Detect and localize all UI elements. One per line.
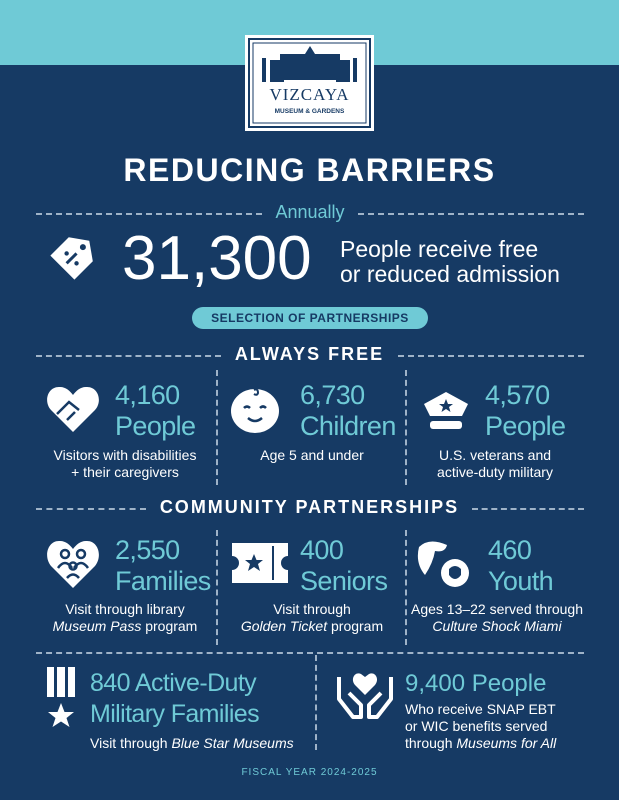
description: U.S. veterans and bbox=[439, 447, 551, 463]
big number caption bbox=[340, 236, 560, 287]
panel: veterans bbox=[424, 380, 565, 480]
number: 840 Active-Duty bbox=[90, 669, 256, 697]
number bbox=[115, 535, 211, 596]
number: 9,400 People bbox=[405, 670, 546, 697]
number bbox=[90, 669, 259, 728]
number: 400 bbox=[300, 535, 343, 565]
number bbox=[300, 380, 396, 441]
description: Visit through Blue Star Museums bbox=[90, 735, 294, 751]
number: Families bbox=[115, 566, 211, 596]
number: Military Families bbox=[90, 700, 259, 728]
top band bbox=[0, 0, 619, 65]
big number: 31,300 bbox=[122, 224, 312, 293]
description bbox=[411, 601, 583, 634]
description: Visit through bbox=[273, 601, 351, 617]
pill: SELECTION OF PARTNERSHIPS bbox=[211, 311, 409, 325]
big number caption: or reduced admission bbox=[340, 261, 560, 287]
big number caption: People receive free bbox=[340, 236, 538, 262]
description: through Museums for All bbox=[405, 735, 556, 751]
icon: hands heart bbox=[337, 673, 393, 719]
icon: youth faces bbox=[418, 542, 469, 587]
panel: military families bbox=[47, 667, 294, 751]
panel: children bbox=[231, 380, 396, 463]
description: Museum Pass program bbox=[53, 618, 197, 634]
description: Who receive SNAP EBT bbox=[405, 701, 556, 717]
number bbox=[300, 535, 387, 596]
logo bbox=[248, 38, 371, 128]
panel: disabilities bbox=[47, 380, 196, 480]
annually label: Annually bbox=[275, 202, 345, 222]
icon: tag bbox=[50, 237, 93, 280]
panel: families bbox=[47, 535, 211, 634]
icon: heart handshake bbox=[47, 387, 99, 432]
description: Culture Shock Miami bbox=[432, 618, 562, 634]
description bbox=[405, 701, 557, 751]
description bbox=[241, 601, 383, 634]
icon: ticket bbox=[232, 543, 288, 583]
logo: MUSEUM & GARDENS bbox=[275, 108, 345, 115]
number: 4,160 bbox=[115, 380, 180, 410]
description: Ages 13–22 served through bbox=[411, 601, 583, 617]
number: Children bbox=[300, 411, 396, 441]
number bbox=[488, 535, 553, 596]
number bbox=[115, 380, 195, 441]
description: active-duty military bbox=[437, 464, 553, 480]
footer: FISCAL YEAR 2024-2025 bbox=[241, 767, 378, 778]
panel: youth bbox=[411, 535, 583, 634]
number bbox=[485, 380, 565, 441]
number: People bbox=[115, 411, 195, 441]
panel: snap bbox=[337, 670, 557, 751]
number: Seniors bbox=[300, 566, 387, 596]
number: Youth bbox=[488, 566, 553, 596]
number: 6,730 bbox=[300, 380, 365, 410]
number: People bbox=[485, 411, 565, 441]
description: Visitors with disabilities bbox=[54, 447, 196, 463]
description: Visit through library bbox=[65, 601, 185, 617]
description bbox=[54, 447, 196, 480]
icon: baby bbox=[231, 389, 279, 433]
number: 2,550 bbox=[115, 535, 180, 565]
number: 4,570 bbox=[485, 380, 550, 410]
logo: VIZCAYA bbox=[269, 85, 350, 104]
description: + their caregivers bbox=[71, 464, 179, 480]
description: or WIC benefits served bbox=[405, 718, 547, 734]
description bbox=[437, 447, 553, 480]
panel: seniors bbox=[232, 535, 387, 634]
icon: medal bbox=[47, 667, 75, 727]
heading: always free: ALWAYS FREE bbox=[235, 344, 384, 364]
icon: cap bbox=[424, 392, 468, 429]
number: 460 bbox=[488, 535, 531, 565]
description bbox=[53, 601, 197, 634]
pill bbox=[192, 307, 428, 329]
description: Age 5 and under bbox=[260, 447, 364, 463]
icon: family heart bbox=[47, 541, 99, 588]
heading: community partnerships: COMMUNITY PARTNERSHIPS bbox=[160, 497, 459, 517]
description: Golden Ticket program bbox=[241, 618, 383, 634]
title: REDUCING BARRIERS bbox=[123, 152, 496, 188]
